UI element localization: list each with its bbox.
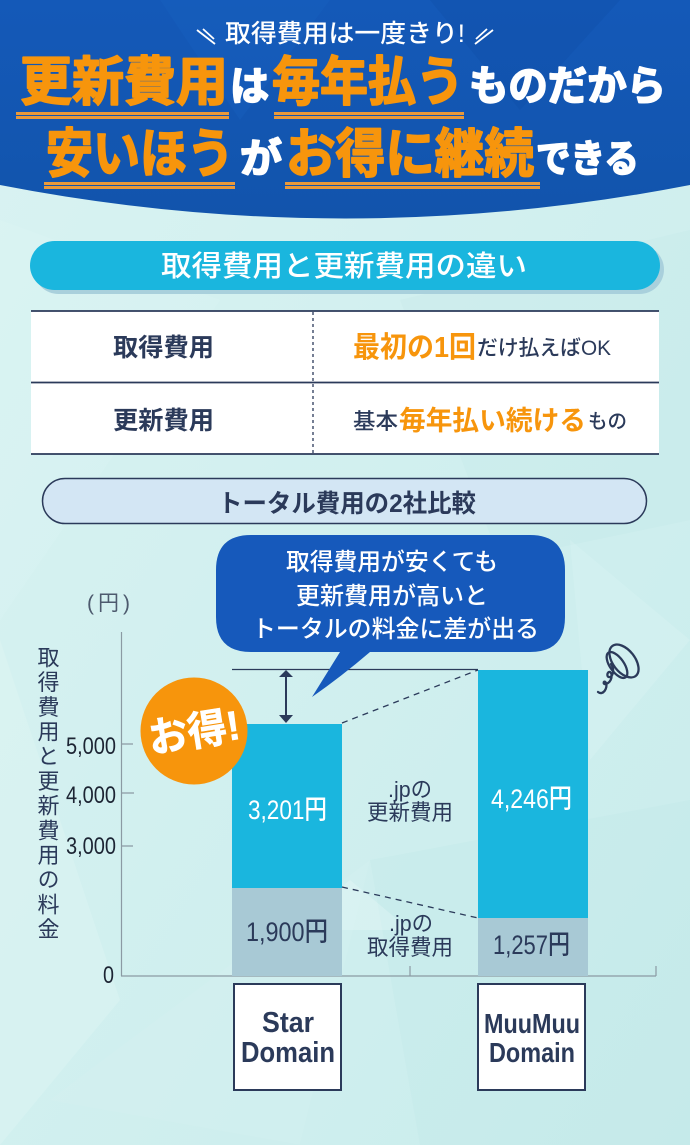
heading pill: total cost: トータル費用の2社比較	[218, 490, 476, 518]
bar: MuuMuu Domain: 1,257円	[493, 930, 570, 960]
row: renewal cost: 基本	[353, 409, 398, 434]
title line 1: 毎年払う	[272, 53, 464, 112]
title line 1: ものだから	[469, 63, 666, 109]
y axis labels	[66, 733, 116, 989]
axes	[121, 632, 656, 976]
title line 2: できる	[536, 139, 639, 181]
label: renewal cost	[367, 777, 453, 825]
y axis unit: (円)	[87, 592, 130, 615]
title line 1: は	[230, 65, 269, 109]
label box: MuuMuu Domain: Domain	[489, 1037, 575, 1068]
heading pill: difference	[30, 241, 664, 294]
row: renewal cost: 更新費用	[113, 407, 214, 435]
y axis labels: 0	[103, 962, 114, 989]
subtitle: 取得費用は一度きり!	[225, 20, 465, 48]
title line 2: が	[240, 137, 282, 181]
label: acquisition cost: 取得費用	[367, 935, 453, 960]
title underlines 1	[16, 112, 464, 119]
label box: Star Domain	[234, 984, 341, 1090]
badge: good deal	[140, 678, 248, 784]
callout	[216, 535, 565, 697]
title underlines 2	[44, 182, 540, 189]
row: renewal cost: もの	[588, 411, 627, 433]
title line 1: 更新費用	[20, 53, 228, 112]
label box: Star Domain: Domain	[241, 1037, 335, 1069]
label box: MuuMuu Domain	[478, 984, 585, 1090]
callout: トータルの料金に差が出る	[252, 616, 539, 643]
y axis labels: 3,000	[66, 833, 116, 860]
bar: MuuMuu Domain: 4,246円	[491, 784, 572, 814]
heading pill: difference: 取得費用と更新費用の違い	[161, 250, 527, 283]
label: renewal cost: 更新費用	[367, 800, 453, 825]
callout: 更新費用が高いと	[296, 583, 488, 610]
label: acquisition cost	[367, 911, 453, 960]
bar: Star Domain	[232, 724, 342, 976]
header banner	[0, 0, 690, 218]
title line 2: 安いほう	[46, 125, 234, 184]
row: renewal cost	[113, 406, 627, 436]
row: renewal cost: 毎年払い続ける	[399, 406, 586, 436]
y axis labels: 5,000	[66, 733, 116, 760]
row: acquisition cost: 取得費用	[113, 334, 214, 362]
title line 1	[20, 53, 666, 112]
heading pill: total cost	[42, 478, 646, 524]
label: acquisition cost: .jpの	[389, 911, 433, 936]
title line 2	[46, 125, 639, 184]
y axis title: 取得費用と更新費用の料金	[34, 646, 60, 942]
comparison table	[31, 311, 659, 454]
label box: Star Domain: Star	[262, 1007, 314, 1039]
row: acquisition cost: だけ払えばOK	[477, 337, 611, 360]
badge: good deal: お得!	[145, 702, 243, 762]
bar: Star Domain: 1,900円	[246, 917, 328, 947]
row: acquisition cost	[113, 331, 611, 364]
label: renewal cost: .jpの	[388, 777, 432, 802]
bar: MuuMuu Domain	[478, 670, 588, 976]
row: acquisition cost: 最初の1回	[353, 331, 476, 364]
callout: 取得費用が安くても	[286, 549, 498, 576]
icon: scribble	[598, 639, 644, 693]
title line 2: お得に継続	[286, 125, 534, 184]
bar chart	[34, 592, 656, 989]
connector lines	[232, 668, 478, 670]
arrow: price gap	[279, 670, 293, 723]
y axis labels: 4,000	[66, 782, 116, 809]
bar: Star Domain: 3,201円	[248, 795, 327, 825]
label box: MuuMuu Domain: MuuMuu	[484, 1008, 580, 1039]
